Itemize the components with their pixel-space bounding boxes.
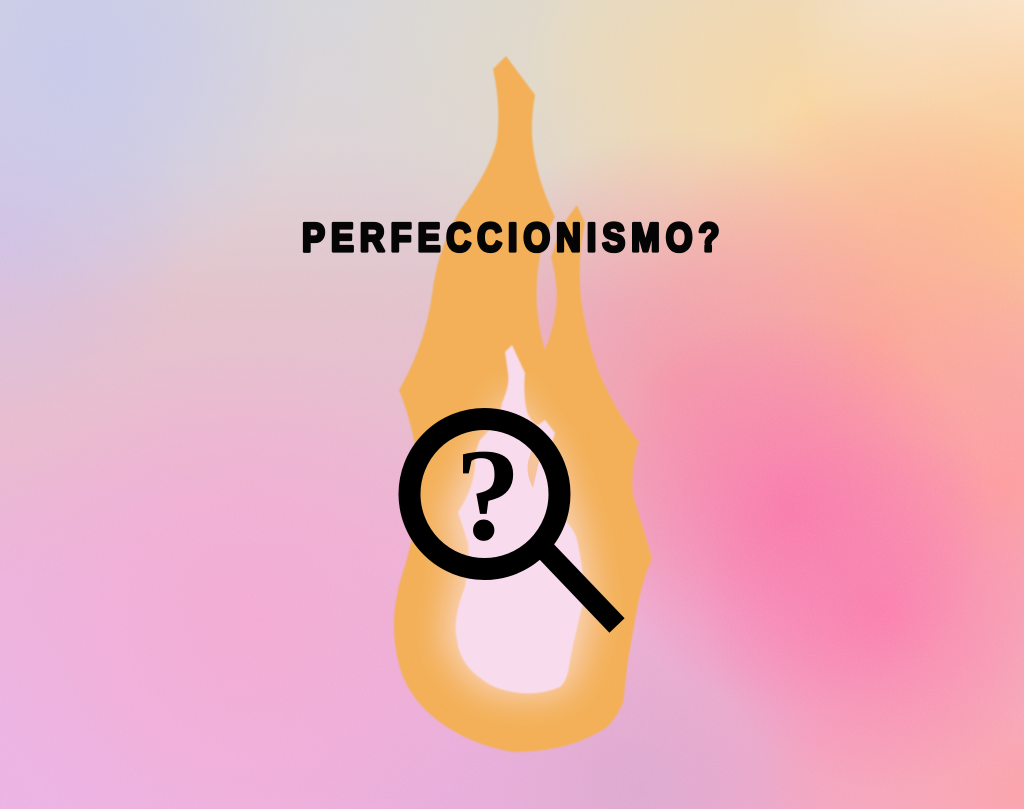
inner flame notch [528,438,541,488]
flame glow [445,385,595,698]
flame illustration [394,56,652,752]
question mark: ? [455,421,521,568]
magnifier lens [410,419,560,569]
icon: magnifying glass with question mark [410,419,617,626]
magnifier handle [543,548,617,626]
title: PERFECCIONISMO? [302,214,719,260]
inner white flame [456,345,583,693]
outer orange flame [394,56,652,752]
